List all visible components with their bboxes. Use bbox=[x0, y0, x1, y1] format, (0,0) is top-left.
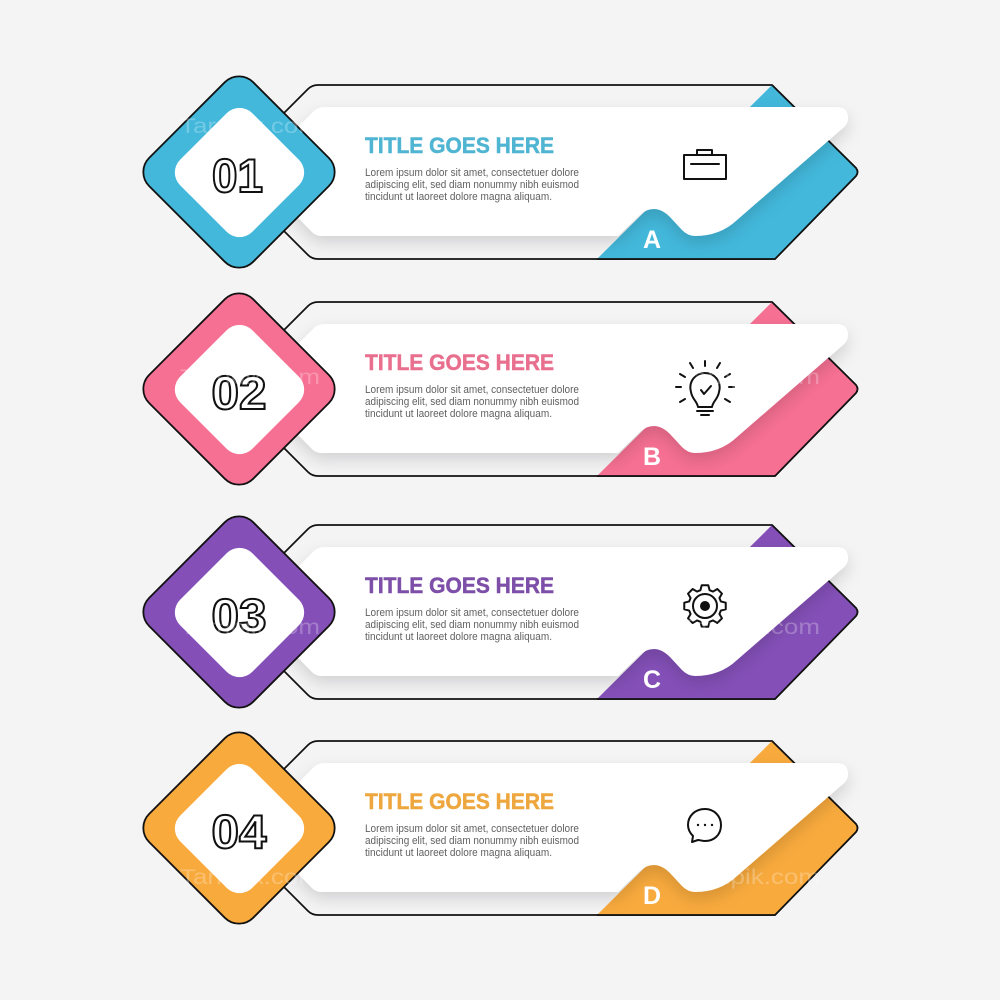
panel: row 03 bbox=[135, 508, 858, 716]
icon: briefcase bbox=[684, 150, 726, 179]
diamond badge: 04 bbox=[212, 805, 266, 858]
outline frame bbox=[260, 302, 858, 476]
diamond badge bbox=[135, 508, 343, 716]
panel: row 01 bbox=[135, 68, 858, 276]
outline frame bbox=[260, 525, 858, 699]
letter badge: B bbox=[643, 443, 661, 471]
diamond badge: 03 bbox=[212, 589, 266, 642]
panel: row 04 bbox=[135, 724, 858, 932]
body text bbox=[365, 823, 579, 859]
band outline bbox=[597, 85, 858, 259]
body text bbox=[365, 167, 579, 203]
colour band bbox=[597, 302, 858, 476]
body text bbox=[365, 384, 579, 420]
body text: Lorem ipsum dolor sit amet, consectetuer dolore bbox=[365, 167, 579, 179]
body text: tincidunt ut laoreet dolore magna aliquam. bbox=[365, 847, 552, 859]
white card bbox=[253, 547, 848, 676]
watermarks bbox=[180, 115, 820, 889]
icon: light bulb with check bbox=[676, 361, 734, 415]
outline frame bbox=[260, 85, 858, 259]
watermarks: Tarnpik.com bbox=[180, 616, 320, 639]
icon: chat bubble bbox=[688, 809, 721, 842]
white card bbox=[253, 324, 848, 453]
colour band bbox=[597, 85, 858, 259]
title: TITLE GOES HERE bbox=[365, 789, 554, 814]
panel: row 02 bbox=[135, 285, 858, 493]
body text: Lorem ipsum dolor sit amet, consectetuer dolore bbox=[365, 607, 579, 619]
letter badge: C bbox=[643, 666, 661, 694]
body text: adipiscing elit, sed diam nonummy nibh euismod bbox=[365, 396, 579, 408]
outline frame bbox=[260, 741, 858, 915]
letter badge: D bbox=[643, 882, 661, 910]
band outline bbox=[597, 302, 858, 476]
title: TITLE GOES HERE bbox=[365, 350, 554, 375]
band outline bbox=[597, 741, 858, 915]
diamond badge bbox=[135, 285, 343, 493]
body text: adipiscing elit, sed diam nonummy nibh euismod bbox=[365, 179, 579, 191]
diamond badge: 01 bbox=[212, 149, 263, 202]
diamond badge bbox=[135, 724, 343, 932]
body text: Lorem ipsum dolor sit amet, consectetuer dolore bbox=[365, 384, 579, 396]
icon: gear bbox=[684, 585, 726, 627]
band outline bbox=[597, 525, 858, 699]
colour band bbox=[597, 525, 858, 699]
title: TITLE GOES HERE bbox=[365, 573, 554, 598]
body text: tincidunt ut laoreet dolore magna aliquam. bbox=[365, 408, 552, 420]
body text bbox=[365, 607, 579, 643]
watermarks: Tarnpik.com bbox=[680, 866, 820, 889]
watermarks: Tarnpik.com bbox=[180, 866, 320, 889]
diamond badge bbox=[135, 68, 343, 276]
watermarks: Tarnpik.com bbox=[680, 366, 820, 389]
body text: Lorem ipsum dolor sit amet, consectetuer dolore bbox=[365, 823, 579, 835]
body text: adipiscing elit, sed diam nonummy nibh euismod bbox=[365, 835, 579, 847]
letter badge: A bbox=[643, 226, 661, 254]
body text: tincidunt ut laoreet dolore magna aliquam. bbox=[365, 191, 552, 203]
body text: adipiscing elit, sed diam nonummy nibh euismod bbox=[365, 619, 579, 631]
white card bbox=[253, 107, 848, 236]
white card bbox=[253, 763, 848, 892]
diamond badge: 02 bbox=[212, 366, 266, 419]
colour band bbox=[597, 741, 858, 915]
watermarks: Tarnpik.com bbox=[680, 616, 820, 639]
watermarks: Tarnpik.com bbox=[680, 115, 820, 138]
body text: tincidunt ut laoreet dolore magna aliquam. bbox=[365, 631, 552, 643]
title: TITLE GOES HERE bbox=[365, 133, 554, 158]
watermarks: Tarnpik.com bbox=[180, 366, 320, 389]
watermarks: Tarnpik.com bbox=[180, 115, 320, 138]
